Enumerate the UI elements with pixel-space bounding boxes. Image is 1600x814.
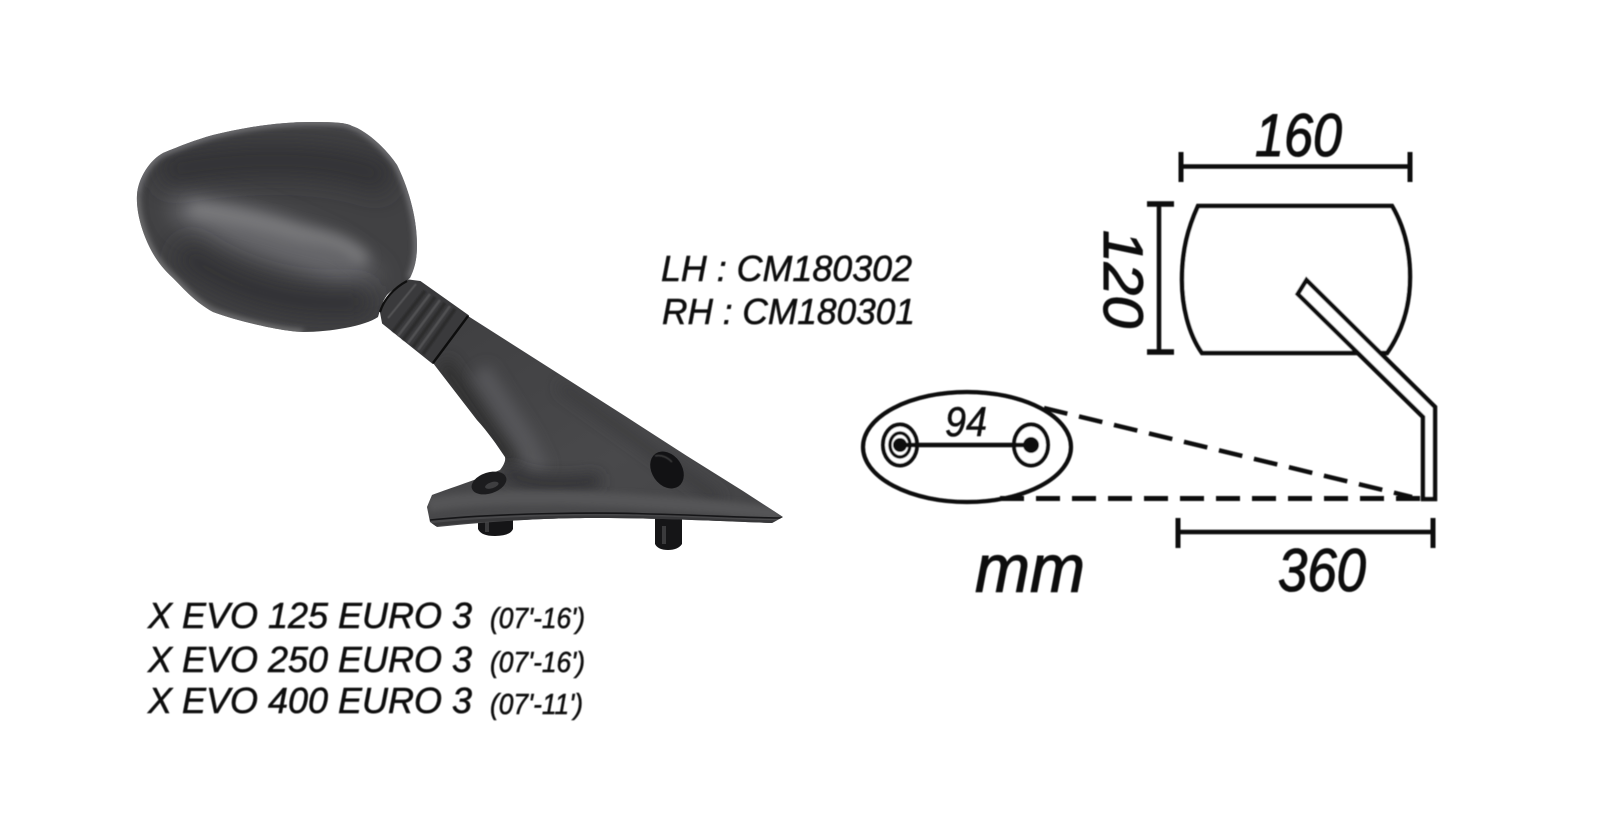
dimension diagram bbox=[863, 102, 1435, 607]
bolt spacing bar bbox=[900, 443, 1031, 447]
model line 125: X EVO 125 EURO 3 bbox=[147, 595, 472, 636]
unit label mm: mm bbox=[975, 531, 1085, 607]
mirror arm bbox=[427, 316, 783, 527]
left hand part number: LH : CM180302 bbox=[661, 248, 912, 289]
boot seam line bbox=[380, 281, 407, 312]
mirror head outline bbox=[1182, 206, 1410, 353]
model line 400: X EVO 400 EURO 3 bbox=[147, 680, 472, 721]
height dimension 120: 120 bbox=[1092, 230, 1155, 328]
mirror arm screw hole bbox=[643, 445, 691, 495]
mirror base screw hole bbox=[469, 467, 509, 499]
mounting base oval bbox=[863, 392, 1071, 502]
model line 125: (07'-16') bbox=[490, 603, 585, 635]
model line 250: (07'-16') bbox=[490, 647, 585, 679]
width dimension 160 bbox=[1181, 102, 1410, 182]
spacing value 94: 94 bbox=[945, 398, 987, 445]
length dimension 360: 360 bbox=[1278, 537, 1366, 604]
right mounting bolt bbox=[1014, 424, 1048, 466]
model line 250: X EVO 250 EURO 3 bbox=[147, 639, 472, 680]
product photo: motorcycle mirror bbox=[137, 122, 783, 550]
mirror mounting posts bbox=[478, 517, 682, 550]
mirror head shell bbox=[137, 122, 417, 332]
rubber boot neck bbox=[380, 280, 468, 363]
mirror arm outline bbox=[1298, 280, 1435, 499]
compatible models list bbox=[147, 595, 585, 721]
part numbers bbox=[661, 248, 915, 332]
height dimension 120 bbox=[1092, 204, 1174, 352]
left mounting bolt bbox=[883, 424, 917, 466]
dashed projection lines bbox=[1000, 408, 1423, 498]
right hand part number: RH : CM180301 bbox=[662, 291, 915, 332]
model line 400: (07'-11') bbox=[490, 689, 583, 721]
length dimension 360 bbox=[1178, 518, 1433, 604]
width dimension 160: 160 bbox=[1255, 102, 1342, 169]
